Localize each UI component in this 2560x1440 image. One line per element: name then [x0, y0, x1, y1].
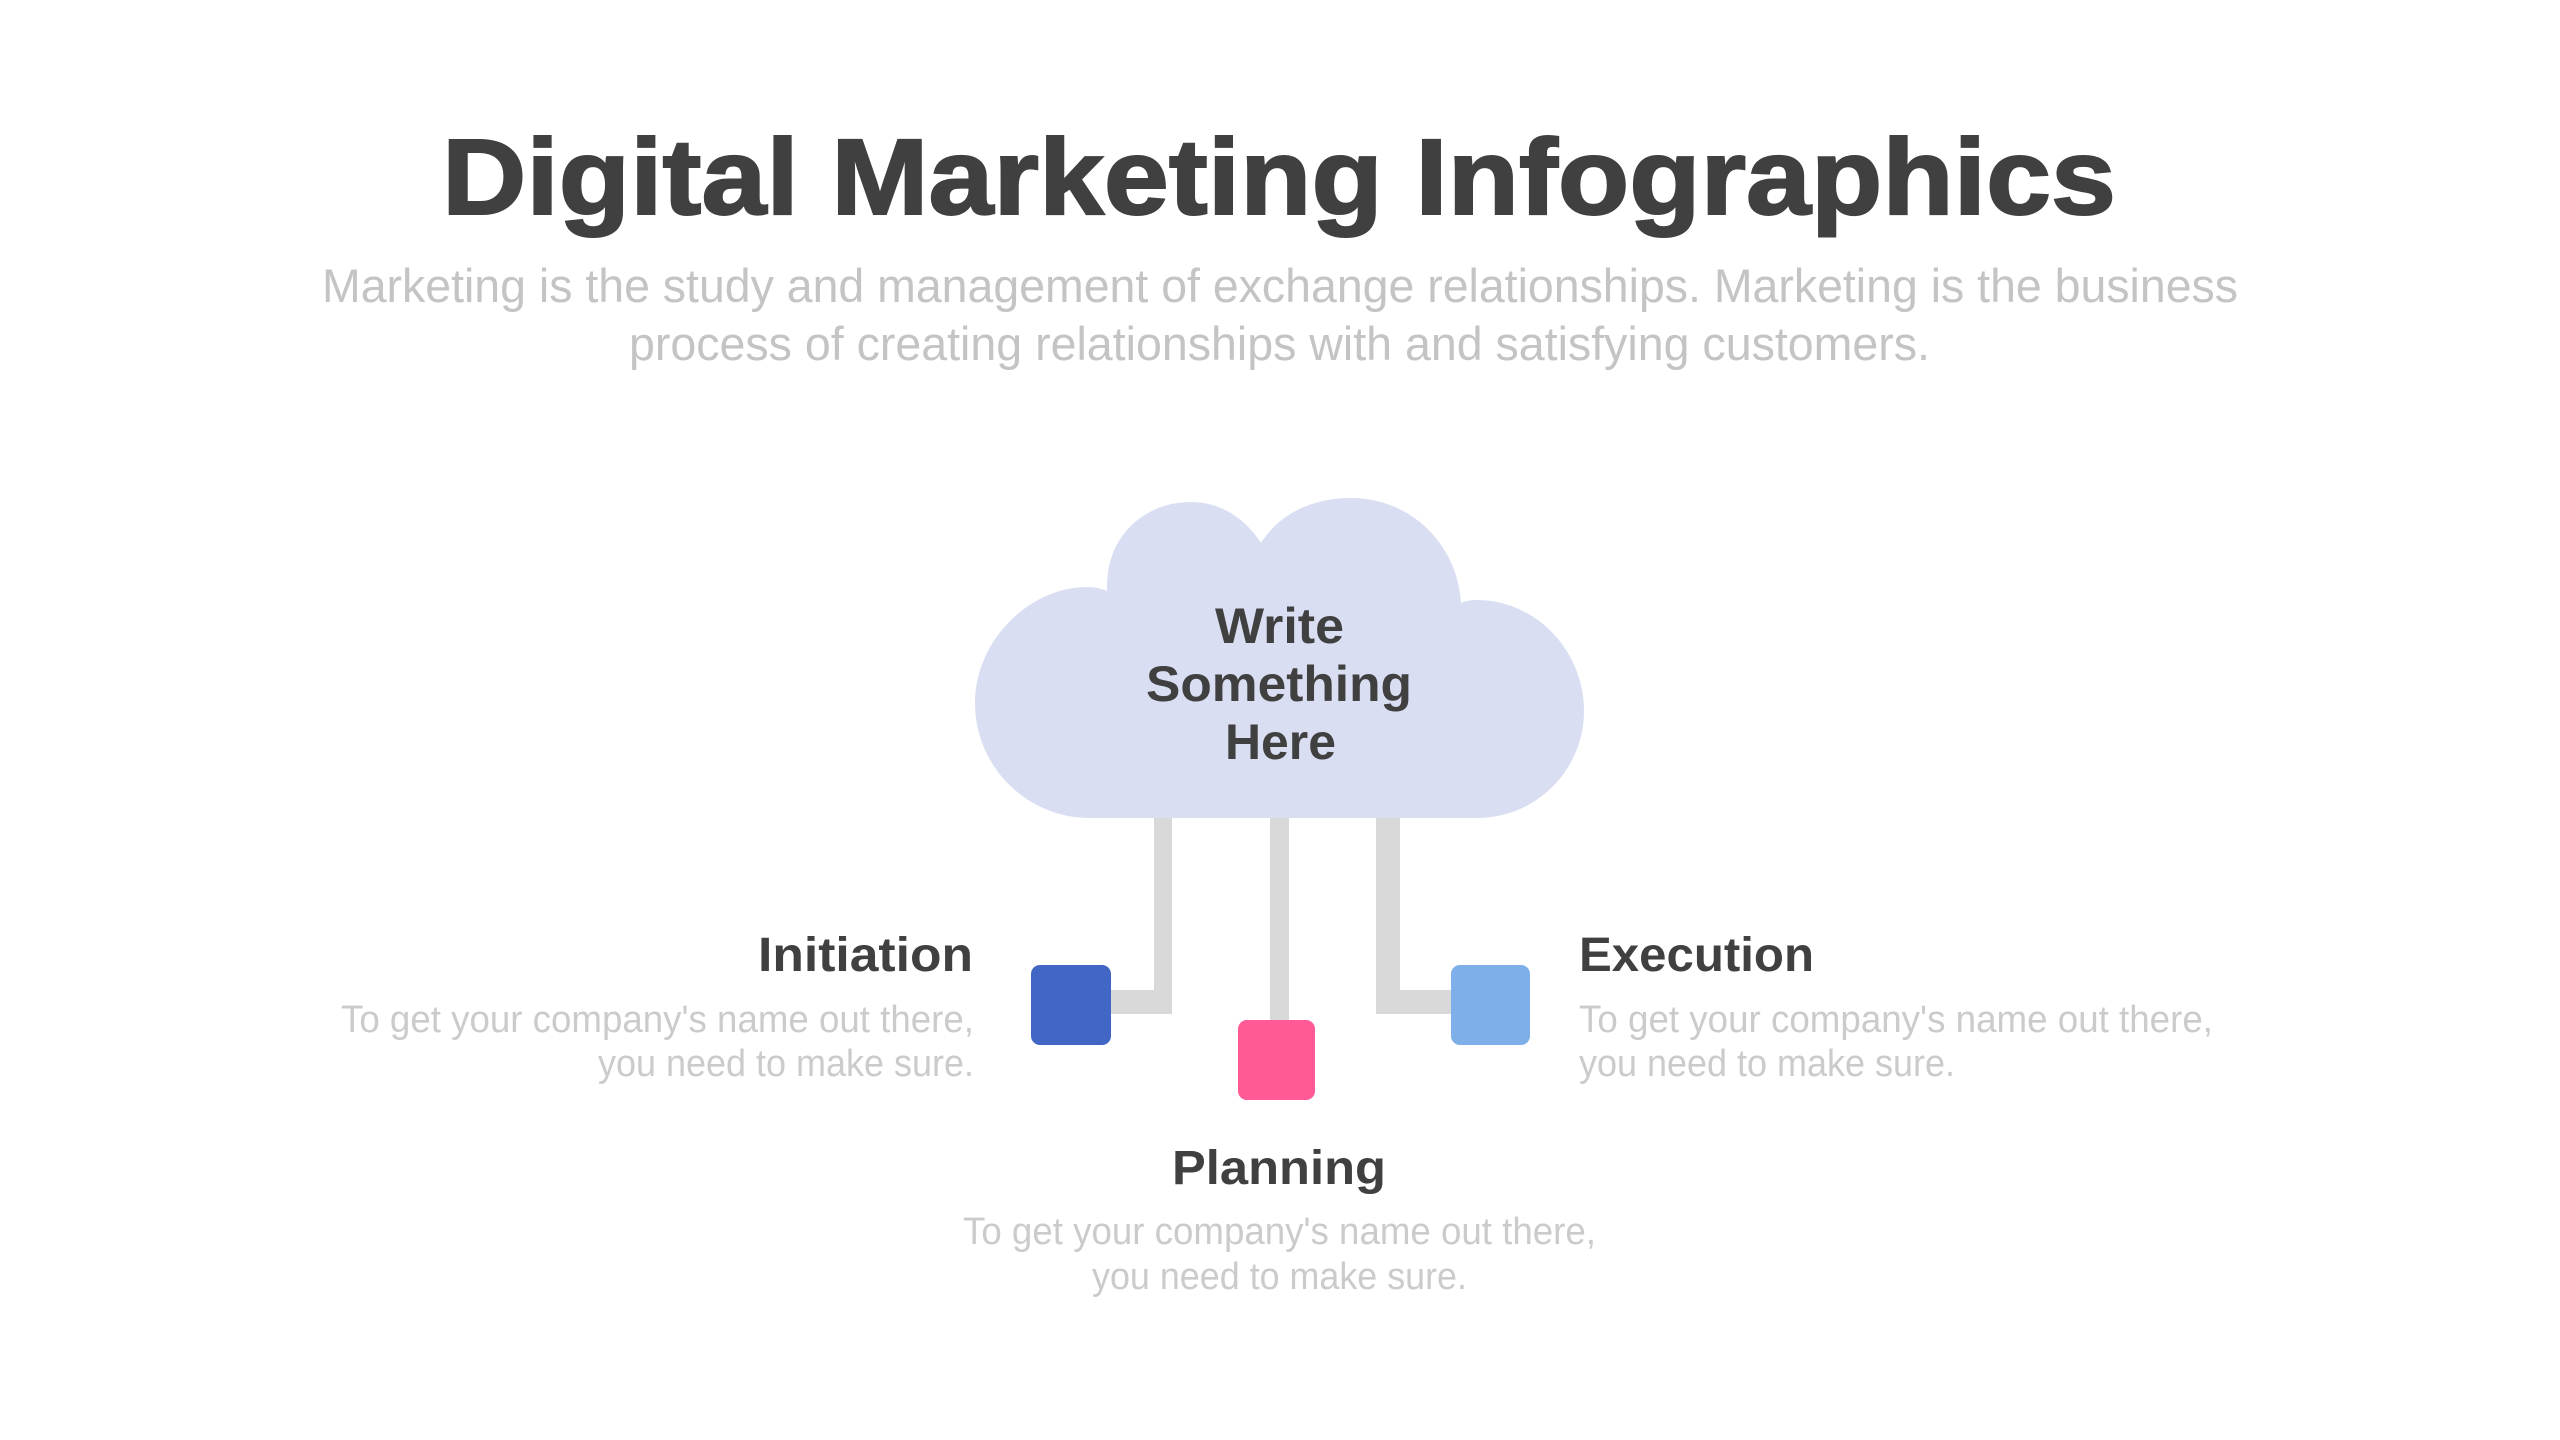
- cloud: [975, 498, 1584, 818]
- cloud text: Write: [1215, 598, 1344, 654]
- subtitle: [322, 259, 2238, 370]
- text block: execution: Execution: [1579, 929, 1814, 982]
- text block: initiation: Initiation: [758, 929, 973, 982]
- text block: planning: [963, 1142, 1596, 1298]
- text block: planning: To get your company's name out there,: [963, 1211, 1596, 1253]
- text block: initiation: you need to make sure.: [598, 1043, 974, 1085]
- text block: execution: To get your company's name out there,: [1579, 999, 2213, 1041]
- text block: planning: you need to make sure.: [1092, 1256, 1467, 1298]
- text block: execution: [1579, 929, 2213, 1085]
- connector lines: [1105, 815, 1455, 1025]
- subtitle: Marketing is the study and management of exchange relationships. Marketing is the business: [322, 259, 2238, 312]
- text block: planning: Planning: [1172, 1142, 1386, 1195]
- subtitle: process of creating relationships with and satisfying customers.: [629, 317, 1930, 370]
- cloud text: [1146, 598, 1412, 770]
- text block: initiation: To get your company's name out there,: [341, 999, 974, 1041]
- icon: initiation square: [1031, 965, 1111, 1045]
- text block: execution: you need to make sure.: [1579, 1043, 1955, 1085]
- icon: execution square: [1451, 965, 1530, 1045]
- title: Digital Marketing Infographics: [442, 116, 2116, 237]
- text block: initiation: [341, 929, 974, 1085]
- cloud text: Something: [1146, 656, 1412, 712]
- icon: planning square: [1238, 1020, 1315, 1100]
- cloud text: Here: [1225, 714, 1336, 770]
